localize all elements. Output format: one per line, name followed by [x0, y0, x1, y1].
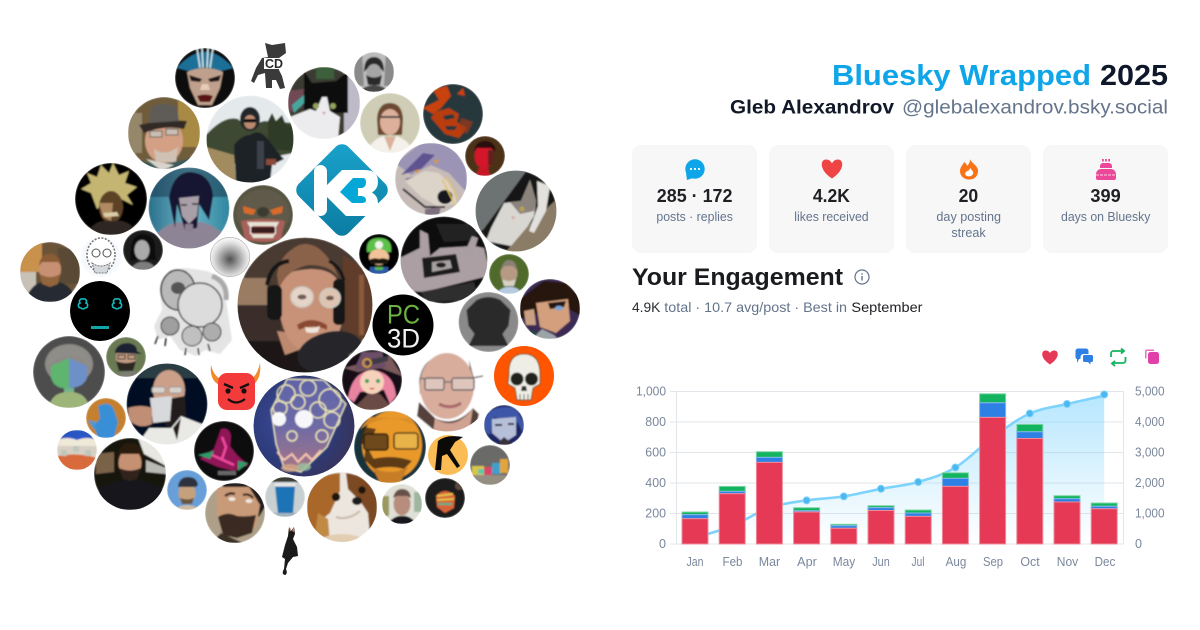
left axis labels: 200 [645, 506, 666, 520]
bar: January [682, 512, 708, 544]
avatar: CD dog logo [251, 43, 286, 89]
bar: September [980, 394, 1006, 544]
title: Bluesky Wrapped [832, 60, 1091, 92]
bar: April [794, 508, 820, 544]
bar: June [868, 506, 894, 544]
bar: August [942, 473, 968, 544]
engagement summary: total · 10.7 avg/post · Best in [664, 299, 847, 315]
engagement summary: September [851, 299, 923, 315]
avatar: ogre mask [233, 185, 293, 245]
avatar: coffee cup [265, 477, 305, 517]
avatar: man in hat [128, 97, 200, 173]
bar: February [719, 486, 745, 544]
panel: posting streak: 20 [959, 185, 978, 206]
avatar: devil emoji [211, 363, 260, 410]
left axis labels: 0 [659, 537, 666, 551]
left axis labels [636, 384, 666, 551]
bar: December [1091, 503, 1117, 544]
avatar: bearded man with bookshelf [20, 242, 80, 302]
bar: July [905, 510, 931, 544]
panel: likes received: 4.2K [813, 185, 851, 206]
avatar: PC 3D logo: PC [387, 300, 420, 330]
avatar: tardigrade illustration [154, 268, 232, 356]
avatar: blue plush bird [86, 398, 126, 438]
heading: your engagement: Your Engagement [632, 264, 843, 291]
avatar: pink haired witch [342, 350, 402, 410]
panel: posting streak: streak [951, 226, 986, 240]
profile name and handle [730, 98, 1168, 118]
cumulative line [695, 396, 1104, 538]
avatar: orange and teal stylised face [423, 84, 483, 144]
avatar: colourful shapes [57, 430, 97, 470]
panel: posts and replies [632, 145, 757, 253]
avatar: main man with headphones and microphone [237, 238, 373, 379]
bar: November [1054, 496, 1080, 544]
panel: days on Bluesky: days on Bluesky [1061, 210, 1151, 224]
panel: posting streak [906, 145, 1031, 253]
right axis labels [1135, 384, 1165, 551]
avatar: hiker [206, 96, 294, 183]
avatar: skull on orange [494, 346, 554, 406]
avatar: grey sphere [210, 237, 250, 277]
right axis labels: 2,000 [1135, 476, 1165, 490]
right axis labels: 5,000 [1135, 384, 1165, 398]
icon: chat bubble [685, 159, 705, 180]
right axis labels: 4,000 [1135, 415, 1165, 429]
month labels: Mar [759, 555, 780, 569]
avatar: mask face [175, 48, 235, 108]
avatar: red-lit man [465, 136, 505, 176]
avatar: blue haired anime girl [484, 405, 524, 445]
engagement summary [632, 299, 923, 315]
panel: posting streak: day posting [936, 210, 1001, 224]
avatar: black with teal flowers [70, 281, 130, 341]
panel: likes received: likes received [794, 210, 869, 224]
avatar: PC 3D logo [372, 294, 434, 356]
month labels: Jun [872, 555, 890, 569]
avatar: man in t-shirt [382, 484, 422, 524]
avatar: Luigi [359, 234, 399, 274]
panel: days on Bluesky: 399 [1090, 185, 1121, 206]
month labels: Oct [1020, 555, 1040, 569]
cumulative area [695, 396, 1104, 544]
panel: posts and replies: posts · replies [656, 210, 733, 224]
engagement summary: 4.9K [632, 299, 661, 315]
left axis labels: 1,000 [636, 384, 666, 398]
avatar: woman with glasses [360, 93, 420, 153]
avatar: cavalier spaniel [307, 472, 377, 543]
month labels: Jan [686, 555, 704, 569]
icon: birthday cake [1096, 159, 1116, 180]
avatar: PC 3D logo: 3D [387, 324, 420, 354]
left axis labels: 400 [645, 476, 666, 490]
avatar: K3 logo [293, 141, 391, 239]
chart: monthly engagement [636, 384, 1165, 569]
right axis labels: 0 [1135, 537, 1142, 551]
avatar: man in cap with beard [106, 337, 146, 377]
title: 2025 [1100, 60, 1168, 92]
avatar: cat under cover [475, 170, 557, 252]
month labels: Feb [722, 555, 743, 569]
avatar: man with glasses on white [416, 352, 484, 432]
icon: reposts legend arrows [1111, 348, 1126, 366]
avatar: lol textured logo [400, 216, 488, 304]
avatar: bearded man looking up [205, 483, 265, 543]
icon: flame [960, 159, 978, 180]
icon: quotes legend squares [1145, 350, 1159, 364]
left axis labels: 800 [645, 415, 666, 429]
chart gridlines [670, 392, 1124, 544]
avatar: pen sketch [81, 237, 121, 277]
avatar: man with glasses in orange light [354, 411, 426, 483]
avatar: spiky blond character [75, 163, 147, 235]
icon: heart [822, 160, 842, 178]
month labels: Sep [983, 555, 1003, 569]
bar: March [756, 452, 782, 544]
profile name and handle: Gleb Alexandrov [730, 98, 894, 118]
right axis labels: 1,000 [1135, 506, 1165, 520]
chart legend [1042, 348, 1159, 366]
avatar: bearded man in dark jacket [94, 438, 166, 510]
right axis labels: 3,000 [1135, 446, 1165, 460]
avatar: glowing neon skull [254, 376, 354, 476]
month labels: Apr [797, 555, 817, 569]
icon: replies legend bubbles [1075, 348, 1093, 364]
avatar: dark grey silhouette [458, 292, 518, 352]
avatar: colourful containers [470, 445, 510, 485]
month labels [686, 555, 1115, 569]
avatar: black and white cat [288, 67, 360, 139]
icon: likes legend heart [1042, 350, 1058, 364]
profile name and handle: @glebalexandrov.bsky.social [902, 98, 1168, 118]
left axis labels: 600 [645, 446, 666, 460]
month labels: Nov [1057, 555, 1079, 569]
avatar: black and white man [354, 52, 394, 92]
month labels: May [833, 555, 856, 569]
panel: days on Bluesky [1043, 145, 1168, 253]
panel: posts and replies: 285 · 172 [657, 185, 732, 206]
avatar: black cat [282, 527, 298, 575]
month labels: Aug [946, 555, 966, 569]
panel: avatar bubble cluster [20, 43, 580, 575]
stacked bars [682, 394, 1117, 544]
avatar: 3D doll [33, 336, 105, 408]
avatar: CD dog logo: CD [265, 56, 283, 71]
bar: October [1017, 424, 1043, 544]
avatar: anime man with dark hair [520, 279, 580, 339]
month labels: Dec [1095, 555, 1115, 569]
avatar: anime woman with dark hair [148, 167, 230, 249]
avatar: magenta abstract figure [194, 421, 254, 481]
month labels: Jul [912, 555, 924, 569]
bar: May [831, 524, 857, 544]
avatar: black shirt with colourful print [425, 478, 465, 518]
avatar: wolf illustration [395, 143, 467, 215]
avatar: bald man sipping coffee [126, 363, 208, 445]
avatar: black bird on yellow [428, 435, 468, 475]
cumulative points [803, 391, 1108, 504]
panel: likes received [769, 145, 894, 253]
avatar: black and white portrait [123, 230, 163, 270]
avatar: man in cap on blue [167, 470, 207, 510]
icon: info [855, 270, 869, 284]
avatar: older man among trees [489, 254, 529, 294]
